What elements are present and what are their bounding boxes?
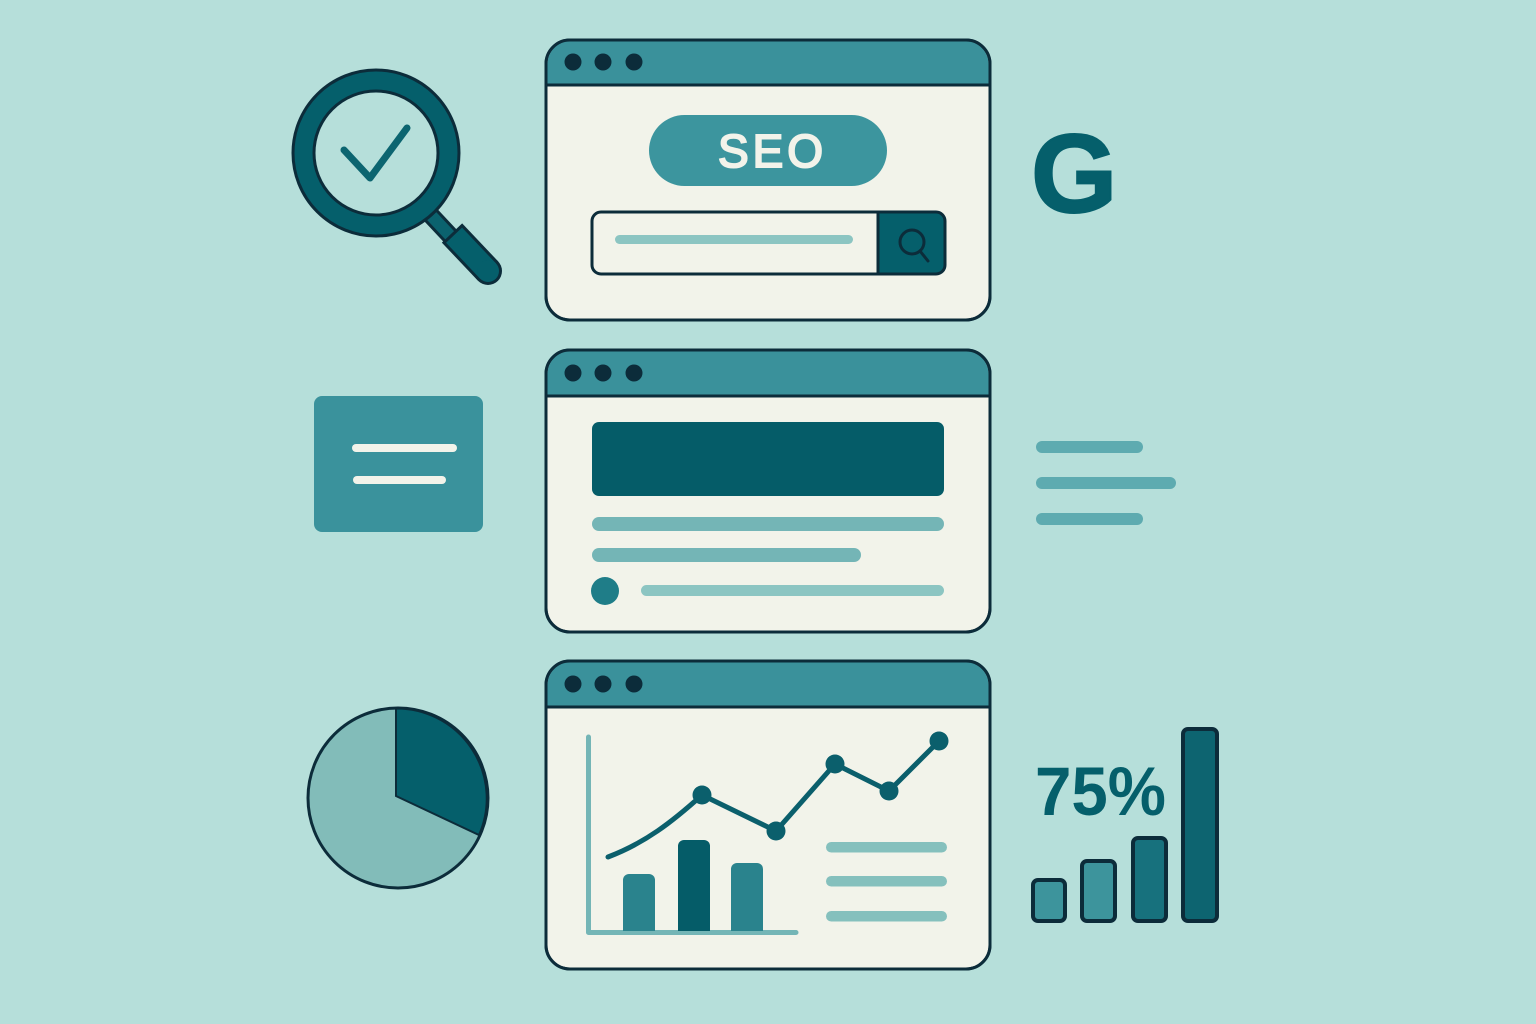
magnifier handle [452,233,502,285]
title bar [548,662,988,706]
chart bars [623,840,763,931]
icon: document card [314,396,483,532]
75% statistic: 75% [1035,753,1166,830]
window dots [564,676,642,692]
icon: magnifying glass with check mark [304,80,502,285]
legend lines [826,842,947,922]
avatar row [591,577,944,605]
pie chart [308,708,488,888]
window body [546,661,990,969]
title bar [548,351,988,395]
magnifier neck [426,210,456,242]
ascending bar chart [1033,729,1217,921]
search bar [592,212,945,274]
icon: small search glass [900,230,928,261]
text lines [592,517,944,562]
SEO label: SEO [718,125,823,177]
panel: content browser window [546,350,990,632]
window dots [564,54,642,70]
panel: SEO search browser window [546,40,990,320]
panel: analytics browser window [546,661,990,969]
chart axes [588,737,796,932]
icon: letter G: G [1031,112,1117,236]
title bar [548,41,988,84]
magnifier ring [304,80,448,226]
window body [546,350,990,632]
check mark [344,128,407,178]
window body [546,40,990,320]
text lines: right of content window [1036,441,1176,525]
hero block [592,422,944,496]
window dots [564,364,642,382]
trend line [608,732,948,857]
SEO pill [649,115,887,186]
